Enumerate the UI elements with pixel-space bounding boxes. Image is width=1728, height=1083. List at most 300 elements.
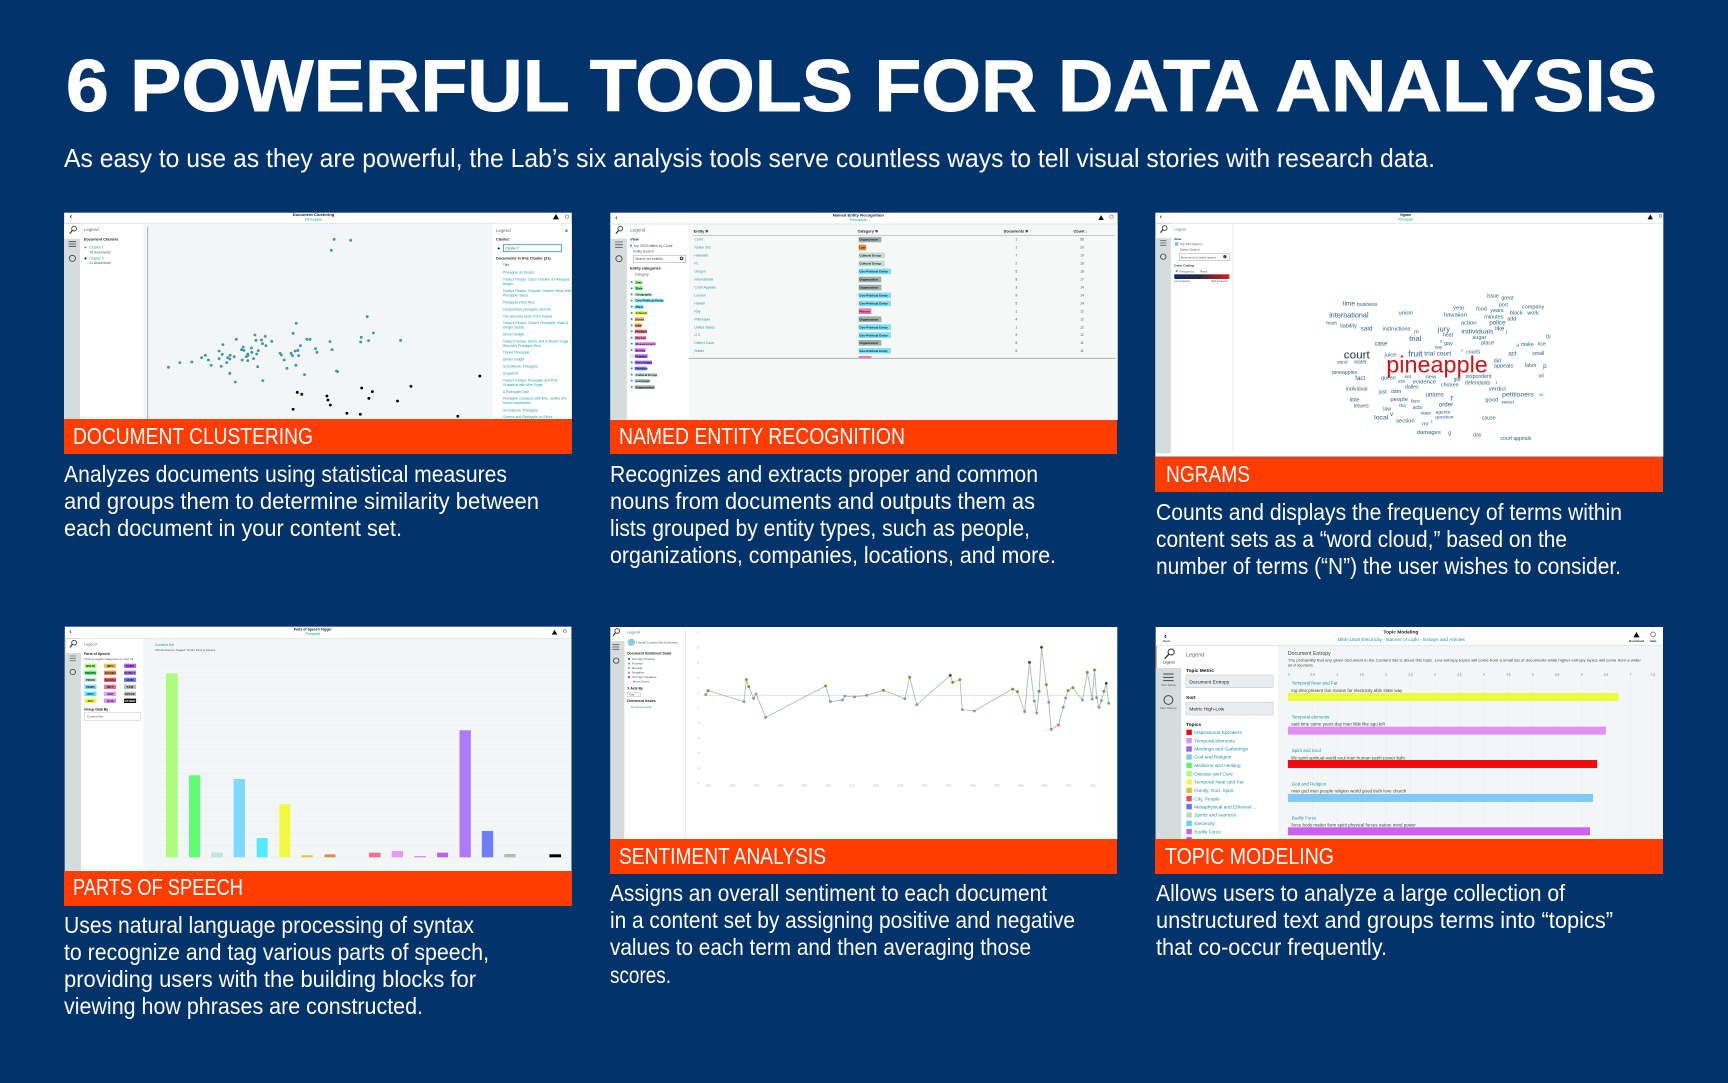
band: parts of speech — [64, 871, 572, 906]
topic bars: man god men people religion world good truth love church — [1291, 789, 1407, 794]
entity table: Court — [694, 238, 703, 242]
document list: A Pineapple Dish — [503, 390, 529, 394]
part of speech legend chips: ADP — [107, 692, 114, 696]
entity table: 3 — [1015, 285, 1017, 289]
word cloud: trial court — [1424, 350, 1451, 357]
entity table — [689, 229, 1116, 358]
word cloud: cause — [1482, 415, 1496, 421]
band: named entity recognition — [610, 420, 1117, 454]
part of speech legend chips: AUX — [107, 699, 114, 703]
screenshot: ngram word cloud: Legend — [1174, 227, 1186, 231]
document list: Pineapple carpaccio with lime, vanilla and — [503, 397, 566, 401]
screenshot: sentiment line chart: 1880 — [778, 784, 784, 787]
word cloud: new — [1425, 374, 1437, 380]
screenshot: parts of speech bar chart: Pineapple — [305, 632, 321, 636]
panel: ngrams — [1155, 213, 1663, 579]
word cloud: port — [1499, 302, 1509, 308]
word cloud: verdict — [1489, 386, 1506, 392]
word cloud: water — [1354, 360, 1367, 366]
caption: topic modeling — [1156, 880, 1613, 960]
band: named entity recognition: NAMED ENTITY RECOGNITION — [619, 423, 905, 449]
document list: Today's Recipe: Sticky Jerk & Brown Sugar — [503, 340, 569, 344]
entity table: Person — [859, 309, 870, 313]
part of speech legend chips — [84, 664, 136, 703]
chart axes: -.6 — [697, 752, 701, 755]
entity table: 11 — [1080, 349, 1084, 353]
document list: Today's Recipe: Cajun Chicken & Pineapple — [503, 278, 570, 282]
caption: topic modeling: unstructured text and groups terms into “topics” — [1156, 907, 1613, 933]
document list: Today's Recipe: Pineapple and Pink — [503, 378, 558, 382]
entity table: 12 — [1080, 317, 1084, 321]
entity table: Geo-Political Entity — [859, 270, 888, 274]
word cloud: state — [1421, 411, 1432, 417]
panel: document clustering — [64, 212, 572, 541]
word cloud: tho — [1399, 403, 1406, 409]
topics legend: Electricity — [1194, 821, 1215, 827]
part of speech legend chips: DET — [107, 685, 113, 689]
entity table: 14 — [1080, 293, 1084, 297]
topic bars: Temporal Near and Far — [1292, 681, 1338, 686]
caption: ngrams — [1156, 499, 1622, 579]
part of speech legend chips: SPACE — [125, 692, 135, 696]
screenshot: document clustering scatter plot: Pineapple — [305, 218, 322, 222]
topics legend: Inspirational Speakers — [1194, 730, 1242, 736]
entity table: 4 — [1015, 317, 1017, 321]
screenshot: document clustering scatter plot: Title — [503, 263, 509, 267]
screenshot: document clustering scatter plot: Cluster: — [496, 238, 510, 242]
word cloud: g — [1448, 430, 1451, 436]
word cloud: s — [1431, 419, 1433, 424]
entity category legend: Geography — [635, 293, 652, 297]
screenshot: parts of speech bar chart: Legend — [84, 642, 97, 646]
document list: Pineapple Fried Rice — [503, 301, 535, 305]
entity table: U.S. — [694, 333, 701, 337]
band: parts of speech: PARTS OF SPEECH — [73, 874, 243, 900]
word cloud: trial — [1409, 334, 1422, 343]
screenshot: topic modeling bars: Run History — [1160, 706, 1177, 710]
word cloud: international — [1329, 312, 1369, 320]
screenshot: topic modeling bars: Back — [1163, 639, 1171, 643]
word cloud: little — [1350, 397, 1360, 403]
caption: document clustering: Analyzes documents using statistical measures — [64, 461, 507, 487]
sentiment line — [706, 647, 1109, 729]
word cloud: instructions — [1383, 326, 1411, 332]
chart axes: 1 — [697, 631, 699, 634]
part of speech legend chips: PROPN — [85, 671, 96, 675]
entropy axis: 4 — [1483, 672, 1485, 676]
screenshot: sentiment line chart: 2000 — [1066, 784, 1072, 787]
chart axes: .8 — [697, 647, 700, 650]
screenshot: parts of speech bar chart: ‹ — [69, 628, 72, 635]
bar chart — [166, 673, 561, 857]
word cloud: did — [1494, 359, 1501, 365]
chart axes — [697, 631, 701, 785]
color scale — [1174, 274, 1229, 283]
part of speech legend chips: ADV — [87, 692, 95, 696]
word cloud: juice — [1384, 352, 1397, 358]
word cloud: acts — [1413, 405, 1423, 411]
word cloud: work — [1526, 310, 1539, 316]
caption: topic modeling: Allows users to analyze a large collection of — [1156, 880, 1566, 906]
word cloud: respondent — [1465, 374, 1492, 380]
word cloud: set — [1405, 374, 1412, 380]
word cloud: evidence — [1413, 379, 1436, 385]
word cloud: fresh — [1326, 320, 1337, 326]
caption: named entity recognition: organizations, companies, locations, and more. — [610, 542, 1056, 568]
screenshot: document clustering scatter plot: ‹ — [70, 212, 73, 221]
entity table: 18 — [1080, 262, 1084, 266]
entity table: 14 — [1080, 285, 1084, 289]
screenshot: topic modeling bars: Document Entropy — [1288, 651, 1331, 657]
entity table: 8 — [1015, 278, 1017, 282]
caption: sentiment analysis: values to each term and then averaging those — [610, 934, 1031, 960]
screenshot: sentiment line chart: 1955 — [946, 784, 952, 787]
screenshot: named entity table: View — [630, 238, 639, 242]
entity category legend: Position — [635, 367, 648, 371]
entity table: 12 — [1080, 325, 1084, 329]
document list: Caramelized pineapple and tofu — [503, 307, 551, 311]
screenshot: named entity table: Legend — [630, 228, 646, 233]
screenshot: ngram word cloud: Ngram — [1400, 213, 1411, 217]
screenshot: document clustering scatter plot: Cluster 1 — [89, 246, 104, 250]
word cloud: face — [1411, 399, 1420, 405]
caption: sentiment analysis: scores. — [610, 962, 671, 988]
word cloud: mr — [1422, 422, 1429, 428]
caption: parts of speech: providing users with the building blocks for — [64, 966, 476, 992]
word cloud: n — [1461, 348, 1463, 353]
topic bars: Temporal elements — [1292, 714, 1330, 719]
document list: Grapefruit — [503, 372, 518, 376]
sentiment points: positive — [707, 669, 1105, 693]
entity table: Geo-Political Entity — [859, 333, 888, 337]
topic bars: life spirit spiritual world soul man human earth power light — [1291, 755, 1405, 760]
entity category legend: Place — [635, 305, 644, 309]
entity table: 7 — [1015, 254, 1017, 258]
word cloud: labor — [1525, 363, 1537, 369]
word cloud: great — [1501, 296, 1514, 302]
screenshot: parts of speech bar chart: Parts of Speech Tagger — [294, 628, 333, 632]
caption: document clustering — [64, 461, 539, 541]
topics legend: Temporal Near and Far — [1194, 780, 1244, 786]
entropy axis: 0 — [1288, 672, 1290, 676]
entity category legend: Time — [635, 286, 643, 290]
word cloud: day — [1473, 433, 1482, 439]
entropy axis: 6 — [1581, 672, 1583, 676]
topics legend: Disease and Cure — [1194, 771, 1233, 777]
chart axes: .6 — [697, 662, 700, 665]
caption: ngrams: Counts and displays the frequency of terms within — [1156, 499, 1622, 525]
chart axes: .2 — [697, 692, 700, 695]
topics legend: God and Religion — [1194, 755, 1232, 761]
entity category legend: Cultural Group — [635, 373, 657, 377]
color scale: Low Frequency — [1174, 280, 1192, 283]
document list: Pineapple Salsa — [503, 293, 528, 297]
screenshot: sentiment line chart: 1850 — [706, 784, 712, 787]
word cloud: fruit — [1408, 349, 1423, 359]
chart axes: 0 — [697, 707, 699, 710]
word cloud: heat — [1443, 333, 1454, 339]
entity table: Geo-Political Entity — [859, 302, 888, 306]
word cloud: local — [1374, 414, 1389, 421]
band: sentiment analysis: SENTIMENT ANALYSIS — [619, 843, 826, 869]
screenshot: parts of speech bar chart: Content Set — [155, 643, 174, 647]
word cloud: people — [1390, 397, 1408, 403]
part of speech legend chips: PUNCT — [125, 671, 135, 675]
panel: sentiment analysis — [610, 627, 1117, 988]
entity category legend: Measurement — [635, 342, 655, 346]
scatter: cluster 1 — [167, 238, 402, 383]
screenshot: topic modeling bars: Metric High-Low — [1189, 706, 1225, 712]
word cloud: like — [1495, 326, 1505, 333]
part of speech legend chips: OTHER — [124, 699, 136, 703]
entity table: 20 — [1080, 246, 1084, 250]
word cloud: law — [1383, 407, 1391, 413]
word cloud: t — [1496, 380, 1498, 385]
screenshot: ngram word cloud: Enter terms to match ngrams — [1181, 255, 1217, 259]
panel: topic modeling — [1155, 627, 1663, 960]
screenshot: parts of speech bar chart: Parts of Speech — [84, 652, 110, 656]
word cloud: use — [1398, 380, 1406, 385]
entity table: Hawaii — [694, 301, 705, 305]
screenshot: sentiment line chart: Overall Content Set Sentiment — [636, 640, 678, 644]
entropy axis: 1.5 — [1359, 672, 1364, 676]
entity table: 8 — [1015, 341, 1017, 345]
sentiment points: negative — [1050, 724, 1060, 731]
entity table: 6 — [1015, 349, 1017, 353]
entity table: PL — [694, 262, 699, 266]
word cloud: court appeals — [1500, 436, 1532, 442]
entity table: 9 — [1015, 293, 1017, 297]
entity table: Britain — [694, 349, 704, 353]
screenshot: topic modeling bars: Topics — [1186, 722, 1202, 728]
word cloud: make — [1521, 342, 1534, 348]
screenshot: document clustering scatter plot: 21 documents — [89, 261, 111, 265]
entity table: 9 — [1015, 333, 1017, 337]
word cloud: j — [1505, 329, 1507, 335]
screenshot: topic modeling bars: Sort — [1186, 695, 1196, 701]
entity table: Geo-Political Entity — [859, 294, 888, 298]
entity table: 19 — [1080, 254, 1084, 258]
word cloud: years — [1490, 308, 1504, 314]
entity category legend: Organization — [635, 385, 655, 389]
word cloud: leaves — [1354, 403, 1369, 409]
screenshot: document clustering scatter plot: Document Clustering — [293, 212, 335, 217]
document list: Today's Recipe: Chiao's Pineapple, Basil & — [503, 321, 569, 325]
document list: Pineapple do Dream — [503, 270, 534, 274]
screenshot: named entity table: Entity categories — [630, 267, 661, 271]
entity table: International — [694, 278, 713, 282]
band: ngrams: NGRAMS — [1166, 461, 1250, 487]
screenshot: sentiment line chart: 1950 — [922, 784, 928, 787]
screenshot: named entity table: Category — [635, 273, 649, 277]
screenshot: topic modeling bars: Legend — [1186, 653, 1204, 659]
entity table: 5 — [1015, 270, 1017, 274]
screenshot: sentiment line chart: 1980 — [1018, 784, 1024, 787]
screenshot: topic modeling bars: Topic Metric — [1186, 668, 1214, 674]
caption: named entity recognition: nouns from documents and outputs them as — [610, 488, 1035, 514]
screenshot: document clustering scatter plot: Cluster 2 — [89, 257, 104, 261]
word cloud: dam — [1391, 389, 1401, 395]
word cloud: action — [1461, 320, 1477, 326]
screenshot: sentiment line chart: X Axis By — [627, 686, 643, 690]
screenshot: ngram word cloud: Frequency — [1179, 269, 1195, 273]
screenshot: topic modeling bars: 1865-1918 Electricity - Banner of Light - Essays and Articles — [1337, 637, 1465, 643]
subtitle: As easy to use as they are powerful, the Lab’s six analysis tools serve countless ways to tell visual stories with research data. — [64, 143, 1435, 173]
screenshot: document clustering scatter plot: Document Clusters — [84, 238, 118, 242]
screenshot: sentiment line chart: 1900 — [826, 784, 832, 787]
screenshot: sentiment line chart: 1855 — [730, 784, 736, 787]
word cloud: agents — [1436, 409, 1451, 415]
screenshot: document clustering scatter plot — [64, 212, 572, 420]
gridlines — [158, 666, 568, 857]
part of speech legend chips: PRON — [86, 678, 95, 682]
part of speech legend chips: SYM — [127, 685, 134, 689]
word cloud: question — [1435, 415, 1454, 421]
screenshot: sentiment line chart: 1870 — [754, 784, 760, 787]
color scale: High Frequency — [1211, 280, 1229, 283]
word cloud: m — [1414, 329, 1419, 335]
word cloud: c — [1440, 339, 1443, 344]
word cloud: small — [1532, 351, 1544, 357]
document list: Burger — [503, 282, 514, 286]
caption: document clustering: each document in your content set. — [64, 515, 402, 541]
entity table: Organization — [859, 286, 878, 290]
document list: Cheese and Pineapple on Sticks — [503, 415, 553, 419]
entropy axis: 5 — [1532, 672, 1534, 676]
caption: parts of speech — [64, 912, 489, 1019]
screenshot: sentiment line chart: Year — [629, 693, 635, 697]
screenshot: document clustering scatter plot: Cluster 2 — [505, 246, 519, 250]
word cloud: pineapple — [1386, 352, 1488, 378]
word cloud: case — [1374, 341, 1388, 348]
screenshot: named entity table: Search for entities — [635, 257, 663, 261]
topics legend — [1186, 730, 1256, 840]
part of speech legend chips: ADJ — [87, 699, 94, 703]
topics legend: Bodily Force — [1194, 829, 1221, 835]
entity table: Oregon — [694, 270, 706, 274]
screenshot: sentiment line chart: Document Sentiment Scale — [627, 652, 672, 656]
band: topic modeling — [1155, 839, 1663, 874]
word cloud: oil — [1538, 374, 1544, 380]
word cloud: good — [1485, 398, 1498, 404]
document list: Schoolbook: Pineapple — [503, 365, 538, 369]
entity table: District Court — [694, 341, 714, 345]
word cloud: damages — [1417, 430, 1441, 436]
entity table: 1 — [1015, 309, 1017, 313]
entropy axis — [1288, 672, 1655, 676]
entropy axis: 4.5 — [1506, 672, 1511, 676]
band: document clustering: DOCUMENT CLUSTERING — [73, 423, 313, 449]
chart axes: -.8 — [697, 767, 701, 770]
entropy axis: 3.5 — [1457, 672, 1462, 676]
word cloud: say — [1435, 346, 1443, 351]
screenshot: ngram word cloud: ‹ — [1160, 214, 1162, 221]
entropy axis: 7.5 — [1650, 672, 1655, 676]
topic bars: God and Religion — [1292, 782, 1327, 787]
word cloud: r — [1451, 394, 1454, 403]
word cloud: court — [1344, 350, 1371, 362]
screenshot: named entity table: Entity Search — [633, 250, 654, 254]
word cloud: appeals — [1494, 364, 1513, 370]
chart axes: -.2 — [697, 722, 701, 725]
screenshot: topic modeling bars: Tool Setup — [1161, 683, 1176, 687]
document list: Dinner tonight — [503, 333, 524, 337]
caption: parts of speech: to recognize and tag various parts of speech, — [64, 939, 489, 965]
word cloud: sweet — [1501, 399, 1515, 405]
screenshot: sentiment line chart: Legend — [627, 631, 640, 635]
entropy axis: 2 — [1385, 672, 1387, 676]
screenshot: sentiment line chart: 10 Issues Found — [631, 705, 652, 709]
screenshot: ngram word cloud: View — [1174, 237, 1182, 241]
word cloud: individual — [1346, 386, 1368, 392]
entity category legend — [630, 280, 664, 389]
topics legend: Spirits and seances — [1194, 813, 1237, 819]
entity table: 12 — [1080, 333, 1084, 337]
word cloud: act — [1508, 350, 1517, 357]
entity table: Geo-Political Entity — [859, 325, 888, 329]
entity table: Court Appeals — [694, 285, 716, 289]
entropy axis: 5.5 — [1555, 672, 1560, 676]
topic bars: force body matter form spirit physical forces nature mind power — [1291, 823, 1416, 828]
entity table: Entity ≑ — [694, 229, 708, 234]
entity category legend: Money — [635, 348, 646, 352]
document list: Schoolbook: Pineapple — [503, 408, 538, 412]
screenshot: document clustering scatter plot: Legend — [84, 227, 99, 232]
caption: topic modeling: that co-occur frequently. — [1156, 934, 1387, 960]
part of speech legend chips: SCONJ — [105, 678, 116, 682]
entity table: Cultural Group — [859, 262, 881, 266]
screenshot: ngram word cloud: Top 100 Ngrams — [1180, 242, 1203, 246]
part of speech legend chips: NUM — [126, 678, 134, 682]
caption: parts of speech: Uses natural language processing of syntax — [64, 912, 474, 938]
entity table: Organization — [859, 341, 878, 345]
band: sentiment analysis — [610, 839, 1117, 874]
screenshot: topic modeling bars — [1156, 627, 1663, 840]
screenshot: parts of speech bar chart: Click to toggle categories on and off — [84, 657, 133, 661]
document list: Dinner tonight — [503, 358, 524, 362]
document list: Ginger Sorbet — [503, 326, 524, 330]
screenshot: sentiment line chart: 1911 — [850, 784, 856, 787]
screenshot: sentiment line chart — [610, 627, 1117, 839]
entity table: London — [694, 293, 706, 297]
part of speech legend chips: NOUN — [86, 664, 95, 668]
word cloud: sugar — [1473, 335, 1486, 341]
entity category legend: Person — [635, 336, 646, 340]
topics legend: City, People — [1194, 796, 1220, 802]
screenshot: document clustering scatter plot: 78 documents — [89, 250, 111, 254]
entity table: Organization — [859, 317, 878, 321]
topic bars — [1288, 681, 1619, 835]
entity category legend: Date — [635, 280, 642, 284]
part of speech legend chips: CCONJ — [105, 671, 116, 675]
screenshot: sentiment line chart: Document Issues — [627, 699, 656, 703]
entity table: Hawaiian — [694, 254, 709, 258]
word cloud: defendants — [1465, 381, 1491, 387]
sentiment points: neutral — [704, 693, 1110, 719]
document list: The welcome taste of the tropics — [503, 314, 553, 318]
word cloud: hawaiian — [1444, 312, 1467, 318]
screenshot: named entity table: ‹ — [615, 214, 617, 221]
topic bars: ing time present tion means far electricity able state way — [1291, 688, 1403, 693]
screenshot: parts of speech bar chart: Group Data By — [84, 707, 108, 711]
panel: parts of speech — [64, 627, 572, 1019]
word cloud: food — [1476, 307, 1487, 313]
entity table: 2 — [1015, 262, 1017, 266]
word cloud: liability — [1340, 324, 1357, 330]
word cloud: th — [1546, 334, 1551, 340]
screenshot: parts of speech bar chart: 100 documents | Tagged: 70,212 Parts of Speech — [155, 648, 216, 652]
word cloud: pineapples — [1332, 370, 1358, 376]
